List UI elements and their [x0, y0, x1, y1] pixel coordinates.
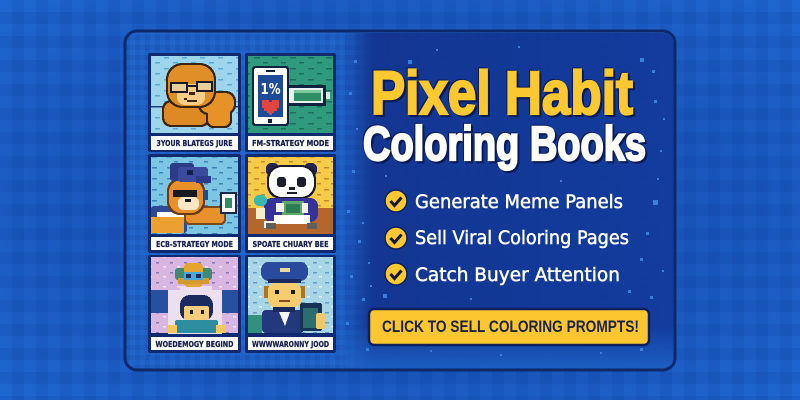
icon: conductor [261, 262, 308, 333]
caption: WWWWARONNY JOOD [252, 340, 329, 349]
panel: comic card 1 [148, 53, 241, 152]
panel: comic card 2 [245, 53, 336, 152]
icon: child [168, 295, 225, 333]
main panel [125, 31, 675, 370]
icon: mug [220, 192, 237, 214]
call to action button [369, 309, 649, 345]
panel: comic card 6 [245, 255, 336, 353]
caption: ECB-STRATEGY MODE [156, 240, 233, 249]
sparkle dots [346, 46, 665, 356]
icon: phone: 1% [260, 80, 280, 98]
icon: phone in hand [300, 303, 325, 331]
panel: comic card 5 [148, 255, 241, 353]
list item: Generate Meme Panels: Generate Meme Panels [415, 191, 623, 213]
panel: comic card 3 [148, 154, 241, 253]
icon: ornament [175, 263, 212, 287]
panel: comic card 4 [245, 154, 336, 253]
icon: sloth [162, 63, 236, 128]
icon: graduate fox [151, 163, 226, 233]
icon: panda [264, 163, 318, 229]
title: Coloring Books: Coloring Books [363, 118, 646, 171]
list item: Sell Viral Coloring Pages: Sell Viral Coloring Pages [415, 227, 629, 249]
caption: SPOATE CHUARY BEE [252, 240, 328, 249]
icon: battery [286, 85, 330, 106]
caption: 3YOUR BLATEGS JURE [156, 139, 232, 148]
call to action button: CLICK TO SELL COLORING PROMPTS! [382, 318, 639, 336]
title: Pixel Habit: Pixel Habit [371, 59, 633, 127]
caption: FM-STRATEGY MODE [252, 139, 329, 148]
list item: Catch Buyer Attention: Catch Buyer Attention [415, 264, 620, 286]
icon: teal orb and cup [254, 195, 267, 219]
caption: WOEDEMOGY BEGIND [156, 340, 234, 349]
icon: heart [262, 100, 279, 115]
